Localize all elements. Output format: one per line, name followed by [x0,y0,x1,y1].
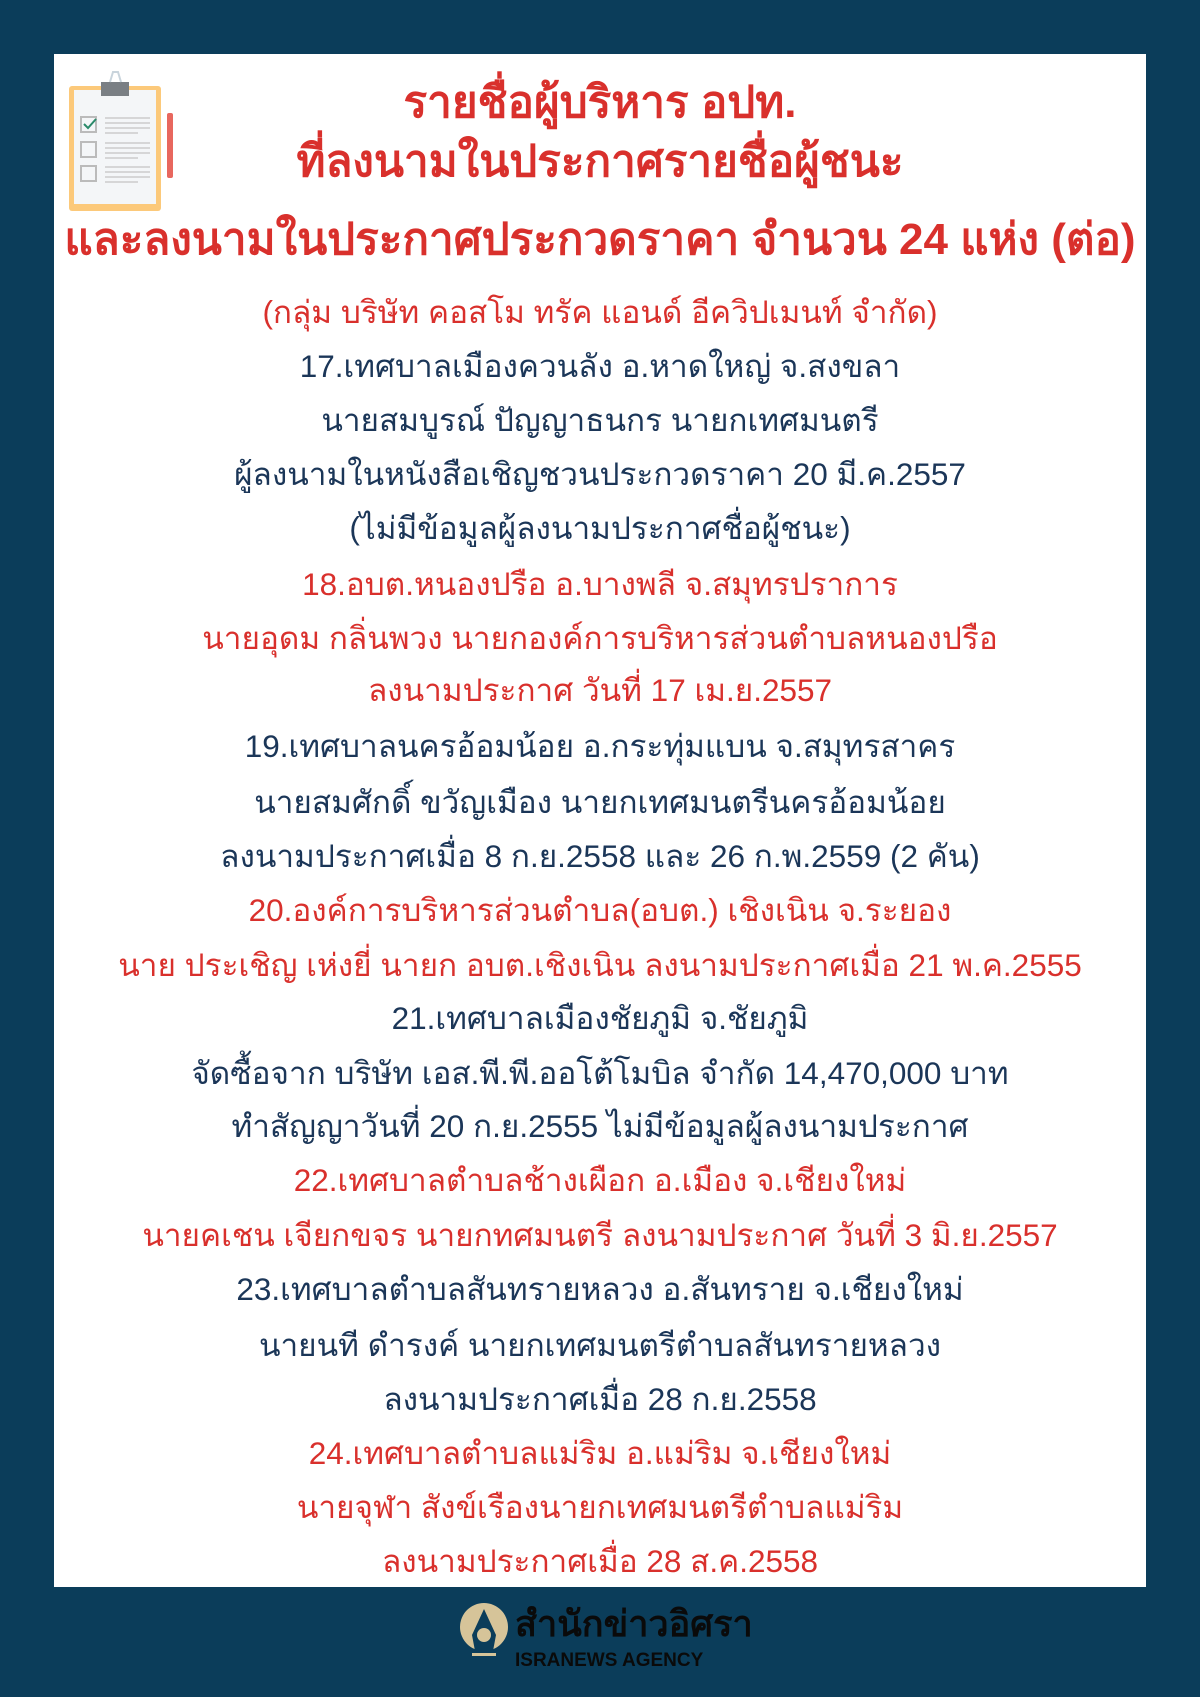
text: นายสมศักดิ์ ขวัญเมือง นายกเทศมนตรีนครอ้อมน้อย [254,784,946,820]
text: ผู้ลงนามในหนังสือเชิญชวนประกวดราคา 20 มี.ค.2557 [234,456,966,492]
text block: list entries [118,294,1082,1579]
text: 22.เทศบาลตำบลช้างเผือก อ.เมือง จ.เชียงใหม่ [294,1162,906,1198]
text: จัดซื้อจาก บริษัท เอส.พี.พี.ออโต้โมบิล จำกัด 14,470,000 บาท [191,1055,1009,1091]
logo: Isranews Agency: ISRANEWS AGENCY [515,1650,703,1671]
text: 18.อบต.หนองปรือ อ.บางพลี จ.สมุทรปราการ [302,566,898,602]
text: 19.เทศบาลนครอ้อมน้อย อ.กระทุ่มแบน จ.สมุทรสาคร [245,728,955,764]
text: ที่ลงนามในประกาศรายชื่อผู้ชนะ [296,137,904,186]
text: 20.องค์การบริหารส่วนตำบล(อบต.) เชิงเนิน จ.ระยอง [249,892,951,928]
logo: Isranews Agency [460,1603,753,1671]
text: (กลุ่ม บริษัท คอสโม ทรัค แอนด์ อีควิปเมนท์ จำกัด) [262,294,938,330]
text: ลงนามประกาศเมื่อ 28 ก.ย.2558 [383,1381,817,1417]
text: 17.เทศบาลเมืองควนลัง อ.หาดใหญ่ จ.สงขลา [300,348,900,384]
icon: pen nib emblem [460,1603,508,1656]
text: ทำสัญญาวันที่ 20 ก.ย.2555 ไม่มีข้อมูลผู้ลงนามประกาศ [231,1108,969,1144]
text: 24.เทศบาลตำบลแม่ริม อ.แม่ริม จ.เชียงใหม่ [309,1435,891,1471]
logo text: สำนักข่าวอิศรา [515,1603,753,1644]
text: 21.เทศบาลเมืองชัยภูมิ จ.ชัยภูมิ [392,1000,808,1036]
text: นาย ประเชิญ เห่งยี่ นายก อบต.เชิงเนิน ลงนามประกาศเมื่อ 21 พ.ค.2555 [118,947,1082,983]
text: ลงนามประกาศเมื่อ 8 ก.ย.2558 และ 26 ก.พ.2559 (2 คัน) [220,838,980,874]
text: นายสมบูรณ์ ปัญญาธนกร นายกเทศมนตรี [321,402,879,438]
text: นายจุฬา สังข์เรืองนายกเทศมนตรีตำบลแม่ริม [297,1489,903,1525]
text: นายคเชน เจียกขจร นายกทศมนตรี ลงนามประกาศ วันที่ 3 มิ.ย.2557 [142,1217,1058,1253]
text: รายชื่อผู้บริหาร อปท. [404,78,796,127]
text: (ไม่มีข้อมูลผู้ลงนามประกาศชื่อผู้ชนะ) [349,510,851,546]
text: ลงนามประกาศ วันที่ 17 เม.ย.2557 [368,672,832,708]
text: นายอุดม กลิ่นพวง นายกองค์การบริหารส่วนตำบลหนองปรือ [202,620,998,656]
text: 23.เทศบาลตำบลสันทรายหลวง อ.สันทราย จ.เชียงใหม่ [236,1271,964,1307]
text: นายนที ดำรงค์ นายกเทศมนตรีตำบลสันทรายหลวง [259,1327,941,1363]
text: และลงนามในประกาศประกวดราคา จำนวน 24 แห่ง (ต่อ) [64,215,1136,264]
icon: clipboard [69,71,173,211]
text: ลงนามประกาศเมื่อ 28 ส.ค.2558 [382,1543,818,1579]
title [64,71,1136,264]
